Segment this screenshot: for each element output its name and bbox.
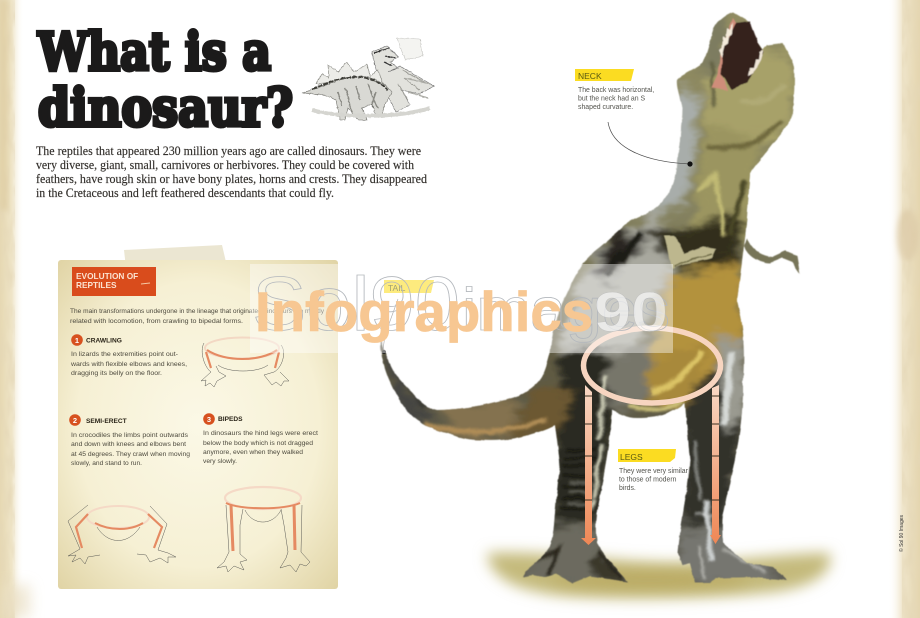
callout: legs: birds. <box>619 485 636 492</box>
watermark veil <box>250 264 673 353</box>
panel intro <box>70 308 325 325</box>
near arm <box>664 236 716 268</box>
step 2: semi-erect: SEMI-ERECT <box>86 418 127 425</box>
intro paragraph <box>36 144 427 200</box>
step 3: bipeds: anymore, even when they walked <box>203 449 303 456</box>
ground hatching <box>312 108 430 116</box>
title: What is a <box>37 22 271 83</box>
step 3: bipeds: very slowly. <box>203 458 237 465</box>
step 1: crawling <box>70 334 187 377</box>
diagram: semi-erect posture <box>68 505 176 564</box>
callout: neck: but the neck had an S <box>578 96 645 102</box>
step 3: bipeds: below the body which is not dragged <box>203 440 313 447</box>
step 3: bipeds: BIPEDS <box>218 416 243 423</box>
intro paragraph: in the Cretaceous and left feathered descendants that could fly. <box>36 186 334 200</box>
panel heading <box>72 267 156 296</box>
callout: legs: to those of modern <box>619 476 677 484</box>
panel heading: REPTILES <box>76 280 117 290</box>
panel intro: related with locomotion, from crawling to bipedal forms. <box>70 318 243 325</box>
tape <box>124 245 226 268</box>
callout: neck <box>575 69 693 167</box>
right parchment edge <box>888 0 920 618</box>
watermark: infographics: 90 <box>594 280 668 343</box>
stegosaurus body <box>302 76 392 120</box>
panel: evolution of reptiles <box>58 245 338 589</box>
step 1: crawling: dragging its belly on the floor. <box>71 370 162 377</box>
illustration: tyrannosaurus <box>375 5 805 595</box>
callout: neck: shaped curvature. <box>578 104 633 111</box>
panel heading: EVOLUTION OF <box>76 271 138 281</box>
sketch of stegosaurus and predator <box>302 38 434 120</box>
step 1: crawling: In lizards the extremities point out- <box>71 351 178 358</box>
left parchment edge <box>0 0 30 618</box>
callout: tail <box>382 280 434 354</box>
copyright credit: © Sol 90 Images <box>898 514 905 552</box>
upper teeth <box>719 22 733 58</box>
step 2: semi-erect: and down with knees and elbows bent <box>71 441 186 448</box>
step 2: semi-erect: 2 <box>73 416 77 425</box>
title: dinosaur? <box>38 78 293 139</box>
step 2: semi-erect: at 45 degrees. They crawl when moving <box>71 451 190 458</box>
step 3: bipeds: 3 <box>207 415 211 424</box>
step 2: semi-erect <box>69 414 190 467</box>
step 2: semi-erect: In crocodiles the limbs point outwards <box>71 432 189 439</box>
near arm shading <box>674 254 712 266</box>
step 3: bipeds <box>203 413 318 465</box>
step 3: bipeds: In dinosaurs the hind legs were erect <box>203 430 318 437</box>
stegosaurus plates <box>316 62 384 86</box>
callout: neck: The back was horizontal, <box>578 87 654 94</box>
step 2: semi-erect: slowly, and stand to run. <box>71 460 142 467</box>
intro paragraph: The reptiles that appeared 230 million years ago are called dinosaurs. They were <box>36 144 421 158</box>
panel intro: The main transformations undergone in the lineage that originated dinosaurs are mostly <box>70 308 325 315</box>
watermark: outlined brand name: Sol90 <box>252 262 460 347</box>
watermark: outlined brand name: images <box>462 276 670 343</box>
dinosaur body base colour <box>375 5 805 595</box>
intro paragraph: very diverse, giant, small, carnivores or herbivores. They could be covered with <box>36 158 414 172</box>
gum <box>712 18 736 90</box>
intro paragraph: feathers, have rough skin or have bony plates, horns and crests. They disappeared <box>36 172 427 186</box>
callout: neck: NECK <box>578 71 602 81</box>
callout: legs: LEGS <box>620 452 643 462</box>
watermark: outlined brand name <box>252 262 670 347</box>
lower teeth <box>748 50 764 76</box>
callout: tail: TAIL <box>388 283 406 293</box>
step 1: crawling: 1 <box>75 336 79 345</box>
title <box>37 22 293 139</box>
anatomical overlay: hips and legs <box>581 328 721 545</box>
far arm <box>744 238 800 274</box>
callout: legs: They were very similar <box>619 468 689 475</box>
step 1: crawling: CRAWLING <box>86 338 122 344</box>
diagram: biped posture <box>217 487 310 572</box>
callout: legs <box>618 449 689 492</box>
ground <box>487 552 831 599</box>
mouth <box>721 21 764 90</box>
far dinosaur <box>372 46 434 112</box>
painted streaks <box>395 62 785 580</box>
watermark: infographics: Infographics <box>255 280 593 343</box>
diagram: crawling posture <box>201 338 289 387</box>
step 1: crawling: wards with flexible elbows and knees, <box>70 361 187 368</box>
